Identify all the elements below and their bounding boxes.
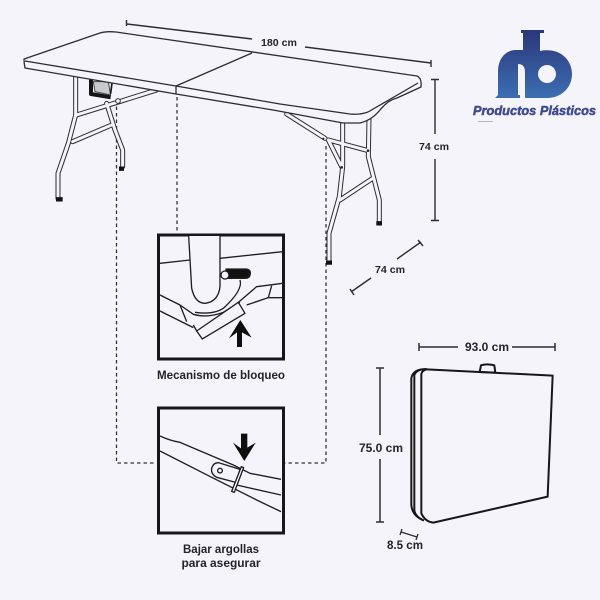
right folding legs <box>287 114 382 263</box>
logo wordmark: Productos Plásticos <box>473 103 596 118</box>
logo mark <box>495 30 572 98</box>
caption: lower rings: para asegurar <box>182 556 261 570</box>
left folding legs <box>56 77 157 199</box>
dimension: table height: 74 cm <box>419 141 449 153</box>
panel: lower rings <box>158 408 284 533</box>
dimension: table height <box>419 79 449 220</box>
dimension: folded thickness <box>387 529 423 552</box>
dashed guide lines <box>116 97 326 463</box>
table top <box>24 32 421 123</box>
dimension: folded width: 93.0 cm <box>465 342 509 354</box>
caption: locking mechanism: Mecanismo de bloqueo <box>157 368 285 382</box>
lock pin <box>226 269 250 278</box>
dimension: table width: 74 cm <box>375 264 405 276</box>
caption: lower rings: Bajar argollas <box>183 542 259 556</box>
dimension: folded width <box>419 342 555 354</box>
logo <box>473 30 596 122</box>
dimension: table length: 180 cm <box>261 37 297 49</box>
up arrow <box>229 320 252 347</box>
locking mechanism detail <box>160 236 283 347</box>
handle <box>480 364 495 373</box>
caption: lower rings <box>182 542 261 570</box>
dimension: folded height: 75.0 cm <box>359 443 403 455</box>
dimension: folded thickness: 8.5 cm <box>387 540 423 552</box>
table illustration <box>24 32 421 263</box>
table top front edge and fold <box>25 53 418 114</box>
folded table <box>411 364 553 523</box>
ring detail <box>160 434 281 512</box>
dimension: table width <box>350 240 423 295</box>
panel: locking mechanism <box>158 235 284 359</box>
down arrow <box>233 434 256 461</box>
dimension: table length <box>126 20 431 67</box>
dimension: folded height <box>359 368 403 522</box>
carry handle <box>93 82 111 95</box>
